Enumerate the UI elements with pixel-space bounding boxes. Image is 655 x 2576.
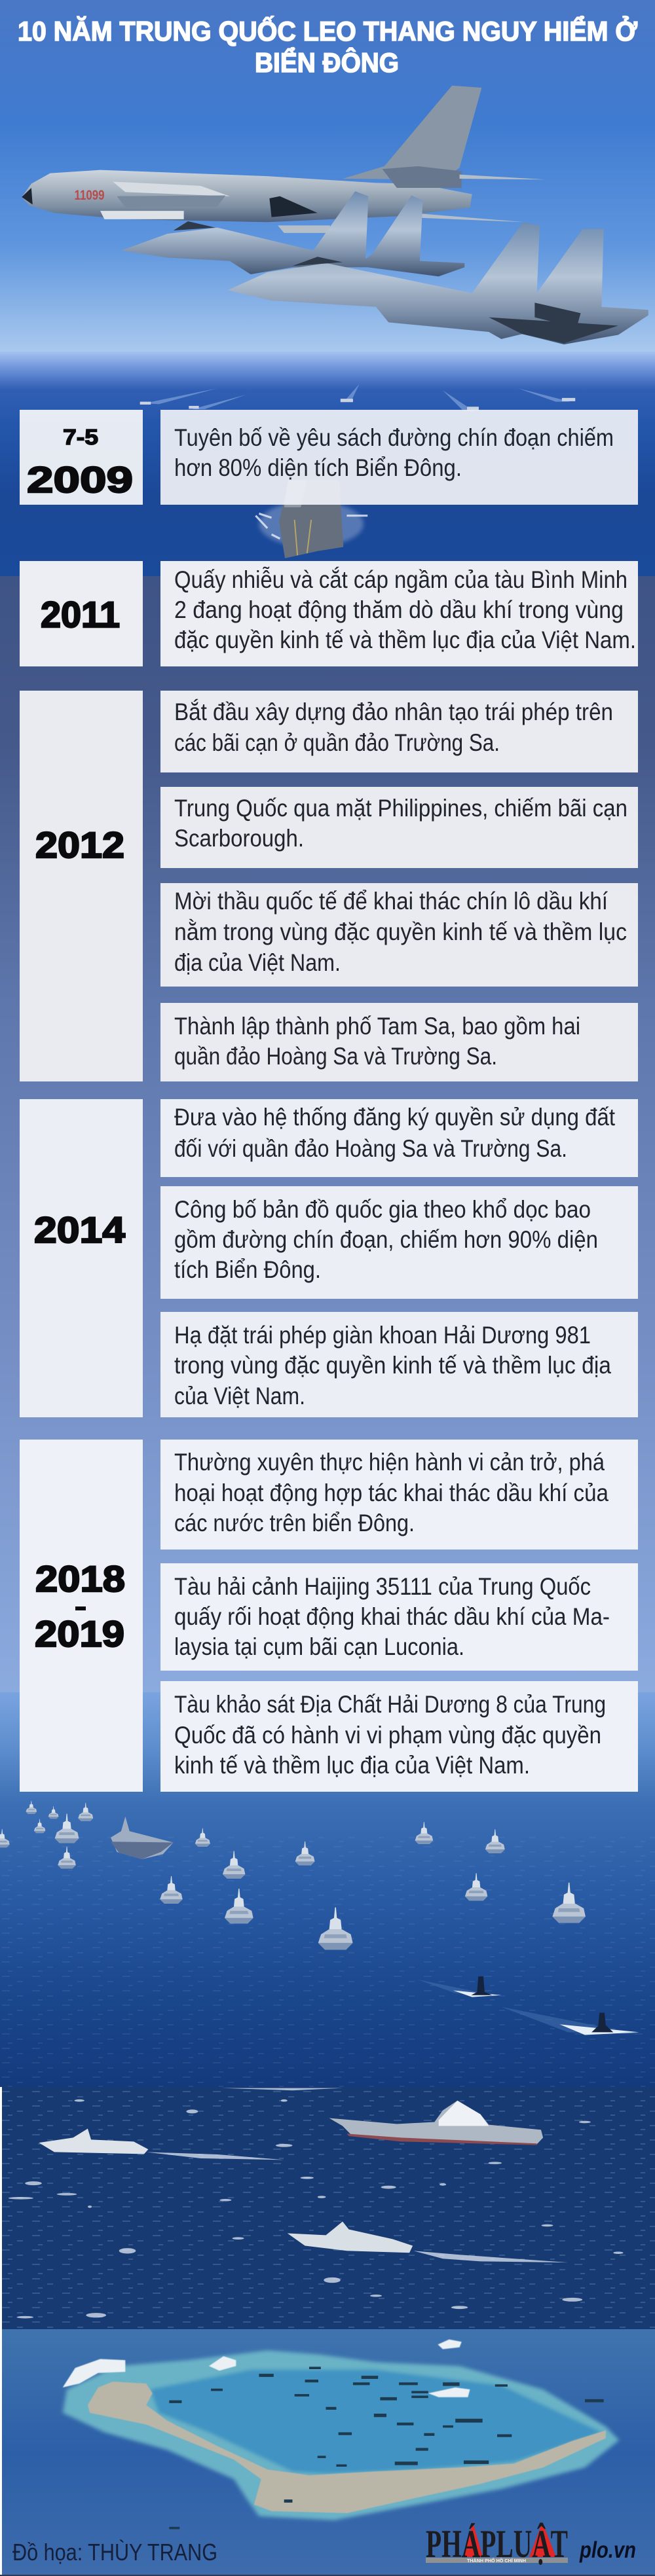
card: 2014 event 3: của Việt Nam. [174, 1383, 305, 1409]
text: year 2018: 2018 [35, 1558, 125, 1599]
background: carrier group photo [2, 2087, 655, 2329]
card: 2012 event 2: Scarborough. [174, 825, 304, 852]
icon: dredging ships in lagoon [169, 2367, 604, 2529]
title [18, 15, 637, 78]
panel: 7-5 2009 [20, 410, 143, 505]
card: 2012 event 4 [160, 1003, 638, 1081]
background: fleet formation photo [0, 1692, 655, 2087]
icon: aircraft carrier [255, 480, 367, 558]
card: 2012 event 3: địa của Việt Nam. [174, 949, 341, 976]
icon: artificial island land [88, 2382, 606, 2513]
icon: escort ships on horizon [140, 384, 575, 411]
card: 2012 event 3 [160, 883, 638, 987]
card: 2012 event 2 [160, 787, 638, 868]
text: tail number on bomber: 11099 [75, 187, 104, 203]
text: year 2012: 2012 [35, 824, 124, 865]
card: 2009 event [160, 410, 638, 505]
card: 2018 event 2: Tàu hải cảnh Haijing 35111 của Trung Quốc [174, 1573, 591, 1600]
card: 2018 event 1: các nước trên biển Đông. [174, 1510, 415, 1536]
icon: aircraft carrier and escorts [39, 2101, 543, 2253]
card: 2014 event 2: Công bố bản đồ quốc gia theo khổ dọc bao [174, 1196, 591, 1223]
card: 2012 event 1: các bãi cạn ở quần đảo Trường Sa. [174, 729, 500, 756]
icon: lagoon [151, 2370, 601, 2473]
icon: whitecaps on sea [9, 2088, 624, 2318]
card: 2014 event 2: tích Biển Đông. [174, 1256, 321, 1283]
logo: plo.vn: plo.vn [579, 2537, 636, 2563]
background: sky photo [0, 0, 655, 352]
text: year 2009: 2009 [27, 459, 133, 500]
icon: warships in formation [0, 1801, 586, 1950]
text: dash [75, 1606, 86, 1610]
title: BIỂN ĐÔNG [255, 46, 399, 78]
text: credit: Đồ họa: THÙY TRANG [12, 2539, 217, 2566]
panel: 2018-2019 [20, 1440, 143, 1792]
icon: outer reef [63, 2350, 619, 2520]
icon: fighter jet rear [121, 191, 464, 276]
logo: Pháp Luật [426, 2522, 568, 2566]
icon: submarines [418, 1976, 639, 2035]
card: 2014 event 1: Đưa vào hệ thống đăng ký quyền sử dụng đất [174, 1104, 616, 1131]
panel: 2012 [20, 691, 143, 1081]
illustration: bomber and fighter jets [22, 86, 648, 344]
card: 2019 event: kinh tế và thềm lục địa của Việt Nam. [174, 1752, 530, 1779]
card: 2014 event 2: gồm đường chín đoạn, chiếm hơn 90% diện [174, 1226, 598, 1253]
card: 2014 event 2 [160, 1186, 638, 1299]
card: 2014 event 3: Hạ đặt trái phép giàn khoan Hải Dương 981 [174, 1322, 591, 1349]
logo: Pháp Luật: THÀNH PHỐ HỒ CHÍ MINH [467, 2557, 526, 2564]
card: 2014 event 3 [160, 1312, 638, 1417]
background: sea photo with carrier group [0, 352, 655, 577]
card: 2018 event 1: hoại hoạt động hợp tác khai thác dầu khí của [174, 1479, 608, 1506]
text: date 7-5: 7-5 [63, 425, 98, 449]
card: 2018 event 1: Thường xuyên thực hiện hành vi cản trở, phá [174, 1449, 605, 1476]
card: 2019 event: Quốc đã có hành vi vi phạm vùng đặc quyền [174, 1722, 601, 1749]
card: 2012 event 3: Mời thầu quốc tế để khai thác chín lô dầu khí [174, 888, 608, 915]
card: 2009 event: hơn 80% diện tích Biển Đông. [174, 454, 462, 481]
card: 2019 event [160, 1681, 638, 1792]
card: 2012 event 1: Bắt đầu xây dựng đảo nhân tạo trái phép trên [174, 698, 613, 725]
background: reef island photo [0, 2329, 655, 2576]
card: 2011 event: 2 đang hoạt động thăm dò dầu khí trong vùng [174, 596, 624, 623]
card: 2014 event 3: trong vùng đặc quyền kinh tế và thềm lục địa [174, 1352, 611, 1379]
logo: Pháp Luật: PHÁPLUẬT [426, 2522, 568, 2566]
panel: 2011 [20, 561, 143, 666]
card: 2018 event 2 [160, 1563, 638, 1671]
card: 2011 event [160, 561, 638, 666]
card: 2014 event 1: đối với quần đảo Hoàng Sa và Trường Sa. [174, 1135, 567, 1162]
card: 2012 event 4: quần đảo Hoàng Sa và Trường Sa. [174, 1043, 497, 1070]
card: 2012 event 4: Thành lập thành phố Tam Sa, bao gồm hai [174, 1013, 580, 1040]
text: year 2014: 2014 [34, 1209, 125, 1250]
icon: clouds [63, 2340, 470, 2397]
text: year 2019: 2019 [35, 1613, 124, 1654]
card: 2014 event 1 [160, 1099, 638, 1177]
text: year 2011: 2011 [41, 594, 120, 635]
card: 2012 event 1 [160, 691, 638, 772]
panel: 2014 [20, 1099, 143, 1417]
icon: fighter jet front [228, 222, 648, 344]
card: 2018 event 2: quấy rối hoạt động khai thác dầu khí của Ma- [174, 1603, 610, 1630]
icon: bomber [22, 86, 545, 233]
background: translucent blue panel behind timeline [0, 576, 655, 1692]
card: 2018 event 2: laysia tại cụm bãi cạn Luconia. [174, 1633, 464, 1660]
card: 2018 event 1 [160, 1440, 638, 1550]
